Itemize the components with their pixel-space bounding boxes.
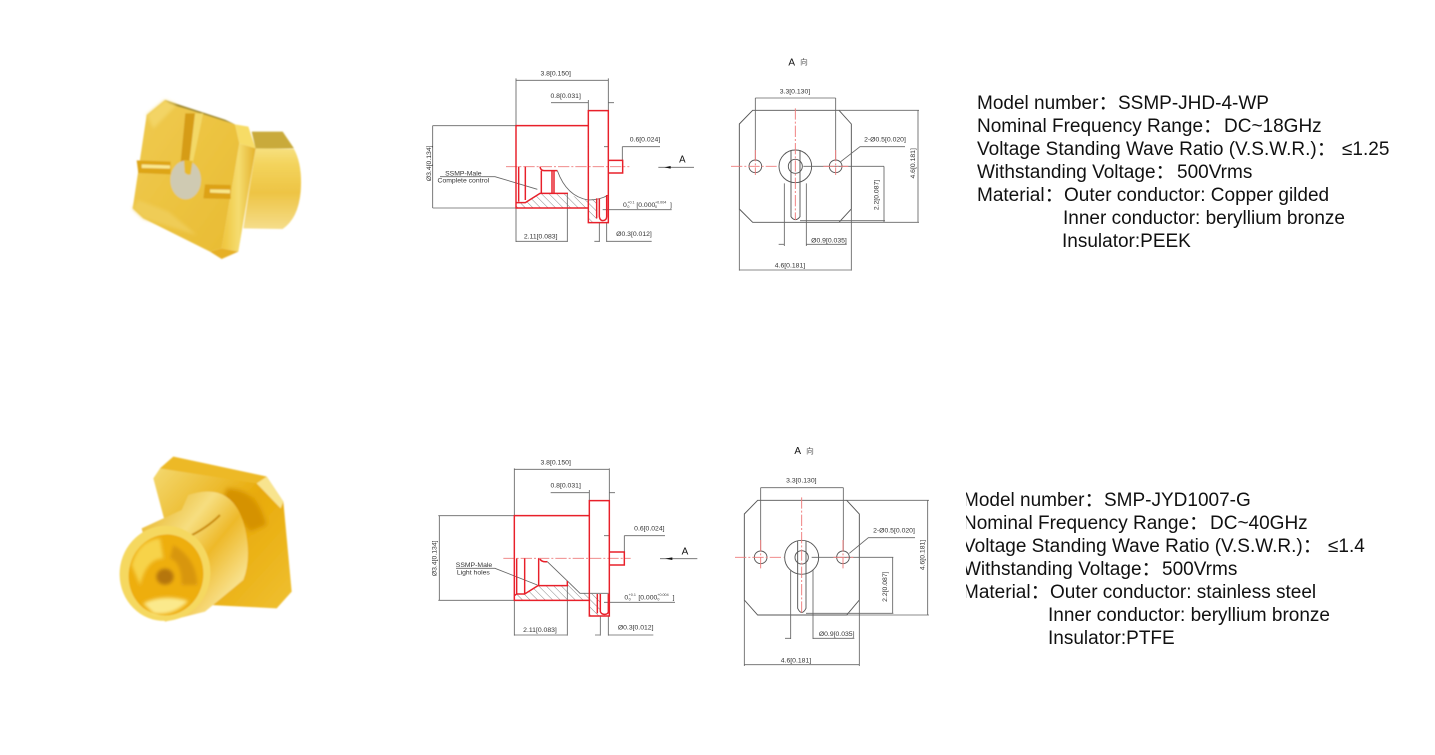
dimension labels: ] <box>673 595 675 602</box>
spec text: SMP-JYD1007-G: SMP-JYD1007-G <box>1104 490 1251 511</box>
product photo: SSMP-JHD-4-WP connector <box>133 100 301 259</box>
dimension lines <box>744 488 929 666</box>
dimension labels: [0.000 <box>636 202 656 209</box>
dimension labels: +0.1 <box>627 200 635 204</box>
spec text: SSMP-JHD-4-WP: Insulator:PEEK <box>1062 231 1191 252</box>
dimension labels: 2-Ø0.5[0.020] <box>864 136 906 143</box>
flange face <box>133 100 239 252</box>
red outline <box>516 111 623 223</box>
product photo: SMP-JYD1007-G connector <box>112 457 292 628</box>
dimension labels: A <box>682 546 689 557</box>
technical drawing: side view, model 1 <box>426 70 694 242</box>
dimension labels: 2.2[0.087] <box>874 180 881 210</box>
spec text: SMP-JYD1007-G: Insulator:PTFE <box>1048 628 1175 649</box>
spec text: SMP-JYD1007-G: Voltage Standing Wave Ratio (V.S.W.R.)： <box>963 536 1322 557</box>
dimension labels: Ø0.9[0.035] <box>811 237 847 244</box>
dimension labels: Complete control <box>438 178 490 185</box>
front ring <box>112 519 218 628</box>
dimension labels: 0.8[0.031] <box>550 483 581 490</box>
spec text: SMP-JYD1007-G: 500Vrms <box>1162 559 1237 580</box>
dimension labels: 4.6[0.181] <box>920 540 927 570</box>
dimension labels: 0.8[0.031] <box>550 93 581 100</box>
flange plate <box>153 457 292 608</box>
spec text: SMP-JYD1007-G: Nominal Frequency Range： <box>963 513 1208 534</box>
dimension labels: A <box>788 57 795 68</box>
spec text: SSMP-JHD-4-WP: Inner conductor: beryllium bronze <box>1063 208 1345 229</box>
spec text: SMP-JYD1007-G <box>963 490 1365 649</box>
technical drawing: front view A, model 2 <box>735 446 929 666</box>
dimension labels: SSMP-Male <box>456 562 492 569</box>
dimension labels: 0.6[0.024] <box>630 136 660 143</box>
insulator <box>170 161 201 199</box>
spec text: SMP-JYD1007-G: Withstanding Voltage： <box>963 559 1161 580</box>
dimension labels <box>426 70 686 241</box>
bore <box>122 528 210 622</box>
dimension lines <box>438 468 675 636</box>
dimension labels: 3.8[0.150] <box>540 460 571 467</box>
dimension labels: 3.8[0.150] <box>540 70 571 77</box>
dimension labels: ] <box>670 202 672 209</box>
right slot <box>203 184 231 199</box>
centre line <box>503 557 631 560</box>
top slot <box>181 113 203 165</box>
barrel <box>252 132 294 149</box>
dimension labels: 0 <box>623 202 627 209</box>
dimension labels: 2.11[0.083] <box>523 627 557 634</box>
spec text: SSMP-JHD-4-WP: Withstanding Voltage： <box>977 162 1175 183</box>
spec text: SSMP-JHD-4-WP: DC~18GHz <box>1224 116 1322 137</box>
dimension labels: Ø0.9[0.035] <box>819 631 855 638</box>
spec text: SMP-JYD1007-G: ≤1.4 <box>1328 536 1365 557</box>
spec text: SMP-JYD1007-G: Inner conductor: beryllium bronze <box>1048 605 1330 626</box>
dimension labels <box>432 460 689 634</box>
dimension labels: +0.1 <box>629 593 636 597</box>
spec text: SSMP-JHD-4-WP: Model number： <box>977 93 1117 114</box>
dimension labels: 3.3[0.130] <box>780 88 810 95</box>
hatched section <box>516 193 597 223</box>
dimension labels: Ø3.4[0.134] <box>426 145 433 181</box>
dimension labels: Ø0.3[0.012] <box>618 624 654 631</box>
flange corner and edge <box>235 124 256 148</box>
dimension labels: 2.2[0.087] <box>882 571 889 602</box>
spec text: SMP-JYD1007-G: Outer conductor: stainless steel <box>1050 582 1316 603</box>
dimension labels: 0 <box>657 598 659 602</box>
arrow A <box>660 557 697 560</box>
holes and slot <box>754 551 767 564</box>
barrel <box>142 491 248 622</box>
spec text: SSMP-JHD-4-WP: Outer conductor: Copper gilded <box>1064 185 1329 206</box>
technical drawing: front view A, model 1 <box>731 57 919 271</box>
dimension labels: 4.6[0.181] <box>910 148 917 179</box>
dimension labels <box>775 57 917 270</box>
dimension labels: 0 <box>624 595 628 602</box>
holes and slot <box>749 160 762 173</box>
spec text: SSMP-JHD-4-WP: 500Vrms <box>1177 162 1252 183</box>
dimension labels: 0.6[0.024] <box>634 526 665 533</box>
plate outline <box>744 500 859 615</box>
plate outline <box>739 110 851 222</box>
red outline <box>514 501 624 616</box>
dimension labels: 0 <box>627 205 629 209</box>
dimension labels: 2.11[0.083] <box>524 234 558 241</box>
dimension labels: SSMP-Male <box>445 171 482 178</box>
dimension labels: Ø3.4[0.134] <box>432 540 439 576</box>
dimension labels: 向 <box>806 446 814 456</box>
dimension labels: 4.6[0.181] <box>781 657 811 664</box>
red centre lines <box>731 108 848 220</box>
dimension labels: A <box>794 446 801 457</box>
dimension labels: 0 <box>655 205 657 209</box>
spec text: SSMP-JHD-4-WP <box>977 93 1389 252</box>
spec text: SSMP-JHD-4-WP: ≤1.25 <box>1342 139 1389 160</box>
dimension labels: 4.6[0.181] <box>775 263 805 270</box>
arrow A <box>658 166 694 169</box>
left slot <box>137 160 171 174</box>
dimension labels: Light holes <box>457 570 490 577</box>
dimension labels: 向 <box>800 57 808 67</box>
dimension labels: +0.004 <box>655 200 666 204</box>
spec text: SSMP-JHD-4-WP: Nominal Frequency Range： <box>977 116 1222 137</box>
spec text: SSMP-JHD-4-WP: SSMP-JHD-4-WP <box>1118 93 1269 114</box>
dimension labels <box>781 446 927 664</box>
dimension lines <box>433 78 672 242</box>
dimension labels: 2-Ø0.5[0.020] <box>873 527 915 534</box>
dimension labels: [0.000 <box>638 595 658 602</box>
red centre lines <box>735 497 853 613</box>
dimension lines <box>739 98 919 271</box>
dimension labels: A <box>679 155 686 166</box>
spec text: SSMP-JHD-4-WP: Material： <box>977 185 1064 206</box>
spec text: SSMP-JHD-4-WP: Voltage Standing Wave Ratio (V.S.W.R.)： <box>977 139 1336 160</box>
dimension labels: 0 <box>629 598 631 602</box>
spec text: SMP-JYD1007-G: Material： <box>963 582 1050 603</box>
spec text: SMP-JYD1007-G: Model number： <box>963 490 1103 511</box>
hatched section <box>514 581 600 616</box>
centre line <box>506 165 629 168</box>
technical drawing: side view, model 2 <box>432 460 697 636</box>
dimension labels: Ø0.3[0.012] <box>616 231 652 238</box>
spec text: SMP-JYD1007-G: DC~40GHz <box>1210 513 1308 534</box>
dimension labels: +0.004 <box>657 593 669 597</box>
dimension labels: 3.3[0.130] <box>786 478 817 485</box>
